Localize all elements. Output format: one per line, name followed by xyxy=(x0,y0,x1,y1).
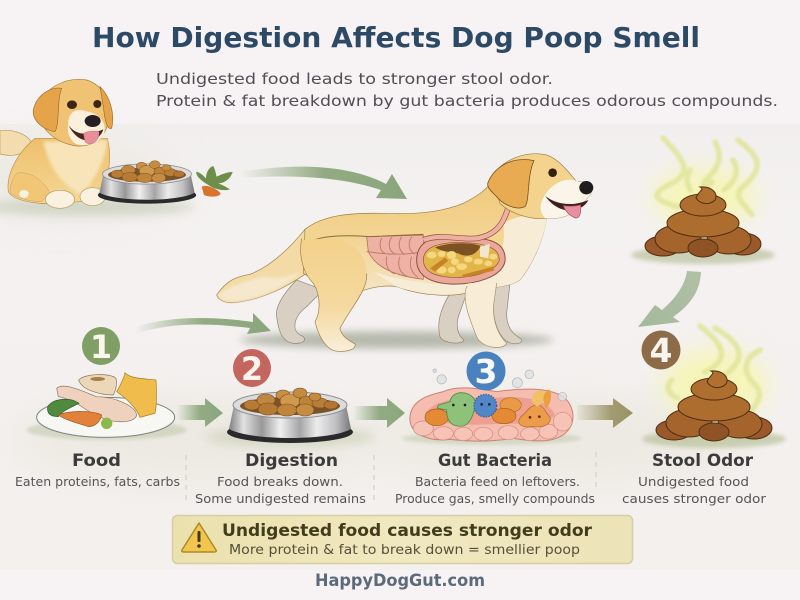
callout text: More protein & fat to break down = smellier poop xyxy=(229,543,580,558)
step labels: gut bacteria xyxy=(395,451,595,506)
step 2: digestion xyxy=(205,349,375,447)
arrow: gut bacteria to stool odor xyxy=(577,398,633,428)
footer site name: HappyDogGut.com xyxy=(315,571,485,590)
arrow: stool down to step 4 xyxy=(638,271,701,327)
step labels: gut bacteria: Bacteria feed on leftovers. xyxy=(415,475,580,489)
step labels: stool odor: Undigested food xyxy=(638,475,749,489)
step labels: stool odor: causes stronger odor xyxy=(622,492,766,506)
digestion bowl illustration xyxy=(227,388,353,443)
step labels: stool odor xyxy=(622,451,766,506)
paper background panel xyxy=(0,124,800,570)
subtitle: Protein & fat breakdown by gut bacteria produces odorous compounds. xyxy=(156,92,778,110)
subtitle: Undigested food leads to stronger stool odor. xyxy=(156,70,553,88)
icon: warning triangle xyxy=(182,523,216,552)
tail xyxy=(217,229,307,303)
illustration: happy sitting dog with bowl xyxy=(0,79,233,216)
esophagus xyxy=(423,209,508,240)
step labels: stool odor: Stool Odor xyxy=(652,451,754,471)
gut bacteria illustration xyxy=(402,369,582,445)
number badge 3: 3 xyxy=(475,352,497,391)
arrow: digestion to gut bacteria xyxy=(353,398,405,428)
step labels: food: Food xyxy=(72,451,121,471)
step 3: gut bacteria xyxy=(402,352,582,445)
step labels: food xyxy=(15,451,180,489)
intestines xyxy=(310,234,423,279)
arrow: food to digestion xyxy=(177,398,223,427)
step labels: digestion: Some undigested remains xyxy=(195,492,366,506)
callout xyxy=(172,516,632,564)
step labels: digestion xyxy=(195,451,366,506)
step 4: stool odor xyxy=(642,326,786,448)
stool illustration with stink waves xyxy=(642,326,786,448)
number badge 1 xyxy=(82,327,120,366)
step 1: food xyxy=(27,327,187,440)
illustration: dog with digestive system xyxy=(217,154,593,351)
number badge 4 xyxy=(642,330,680,370)
callout heading: Undigested food causes stronger odor xyxy=(222,521,593,540)
subtitle xyxy=(156,70,778,110)
title: How Digestion Affects Dog Poop Smell xyxy=(92,21,700,54)
food plate illustration xyxy=(27,373,187,440)
food bowl xyxy=(98,161,196,204)
number badge 3 xyxy=(466,352,506,391)
arrow: food to dog xyxy=(135,313,271,334)
step labels: gut bacteria: Gut Bacteria xyxy=(438,451,552,471)
number badge 2: 2 xyxy=(241,350,263,388)
illustration: steaming stool xyxy=(631,138,775,264)
far legs xyxy=(276,280,522,344)
stomach xyxy=(417,236,505,284)
step labels: gut bacteria: Produce gas, smelly compounds xyxy=(395,492,595,506)
step labels: food: Eaten proteins, fats, carbs xyxy=(15,475,180,489)
step labels: digestion: Food breaks down. xyxy=(217,475,343,489)
number badge 1: 1 xyxy=(90,328,112,366)
near hind leg xyxy=(301,238,367,351)
dog sitting xyxy=(0,79,113,208)
near front leg xyxy=(465,283,507,348)
body xyxy=(303,180,547,297)
arrow: bowl to dog xyxy=(240,167,407,199)
carrot and greens xyxy=(196,166,233,197)
step labels: digestion: Digestion xyxy=(245,451,338,471)
head xyxy=(492,154,592,219)
number badge 2 xyxy=(233,349,271,388)
number badge 4: 4 xyxy=(650,331,672,370)
